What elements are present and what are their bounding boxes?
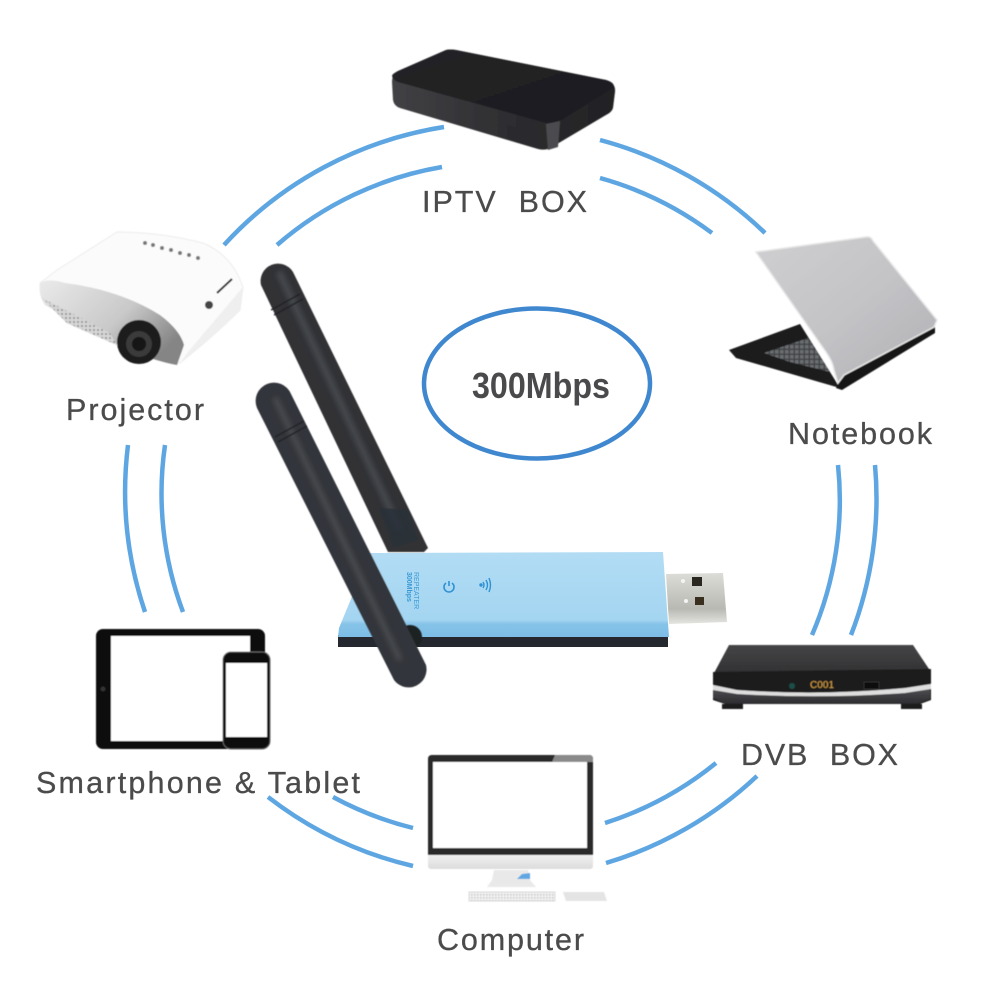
device: IPTV box	[392, 50, 615, 150]
projector right shading	[180, 287, 243, 363]
USB dongle	[338, 552, 727, 647]
device: notebook	[729, 237, 937, 390]
label: Smartphone & Tablet: Smartphone & Tablet	[36, 766, 361, 800]
keyboard	[469, 892, 555, 901]
tablet	[96, 629, 265, 749]
wireless signal arcs	[125, 127, 877, 866]
notebook dark hinge	[836, 325, 935, 390]
icon: wifi	[480, 578, 490, 592]
notebook lid	[756, 237, 937, 383]
label: Projector: Projector	[66, 393, 204, 427]
label: IPTV BOX: IPTV BOX	[422, 185, 587, 219]
rear antenna	[261, 264, 428, 552]
projector white body	[40, 232, 243, 363]
projector lens	[117, 320, 161, 364]
projector grille	[42, 298, 117, 345]
label: Computer: Computer	[437, 923, 584, 957]
DVB display: C001	[810, 680, 834, 691]
device: tablet and smartphone	[96, 629, 270, 749]
monitor glare	[552, 755, 593, 762]
device: computer	[428, 755, 607, 901]
icon: power	[444, 581, 454, 592]
monitor stand	[487, 870, 536, 887]
dongle speed text: 300Mbps	[405, 572, 412, 602]
label: DVB BOX: DVB BOX	[741, 738, 898, 772]
front antenna	[256, 383, 427, 687]
DVB USB port	[864, 682, 879, 689]
notebook base	[729, 324, 840, 388]
DVB lower panel	[713, 686, 930, 704]
dongle dark base	[338, 635, 668, 647]
DVB front	[713, 669, 931, 704]
notebook keyboard	[764, 338, 830, 372]
device: DVB box	[713, 645, 931, 709]
dongle model text: REPEATER	[412, 572, 419, 609]
monitor screen	[433, 762, 587, 848]
label: Notebook: Notebook	[788, 417, 933, 451]
dongle blue body	[338, 552, 669, 637]
device: projector	[40, 232, 243, 365]
DVB silver strip	[713, 684, 931, 696]
DVB feet	[722, 704, 922, 709]
speed value: 300Mbps	[472, 365, 610, 406]
projector side ports	[205, 279, 232, 309]
arcs: DVB box to computer	[605, 763, 757, 863]
monitor bezel	[428, 755, 593, 856]
arcs: smartphone and tablet to projector	[125, 445, 183, 612]
DVB power light	[789, 683, 795, 689]
arcs: IPTV box to notebook	[600, 140, 765, 233]
DVB top	[713, 645, 931, 675]
arcs: notebook to DVB box	[812, 465, 877, 635]
smartphone	[223, 652, 270, 749]
USB plug	[666, 573, 727, 624]
projector top buttons	[143, 241, 200, 260]
projector silver front	[40, 280, 184, 365]
trackpad	[563, 892, 607, 901]
arcs: IPTV box to projector	[224, 127, 444, 245]
speed badge	[424, 308, 650, 458]
blue reflection on stand	[517, 873, 530, 879]
arcs: computer to smartphone and tablet	[268, 797, 413, 866]
monitor chin	[428, 855, 593, 869]
